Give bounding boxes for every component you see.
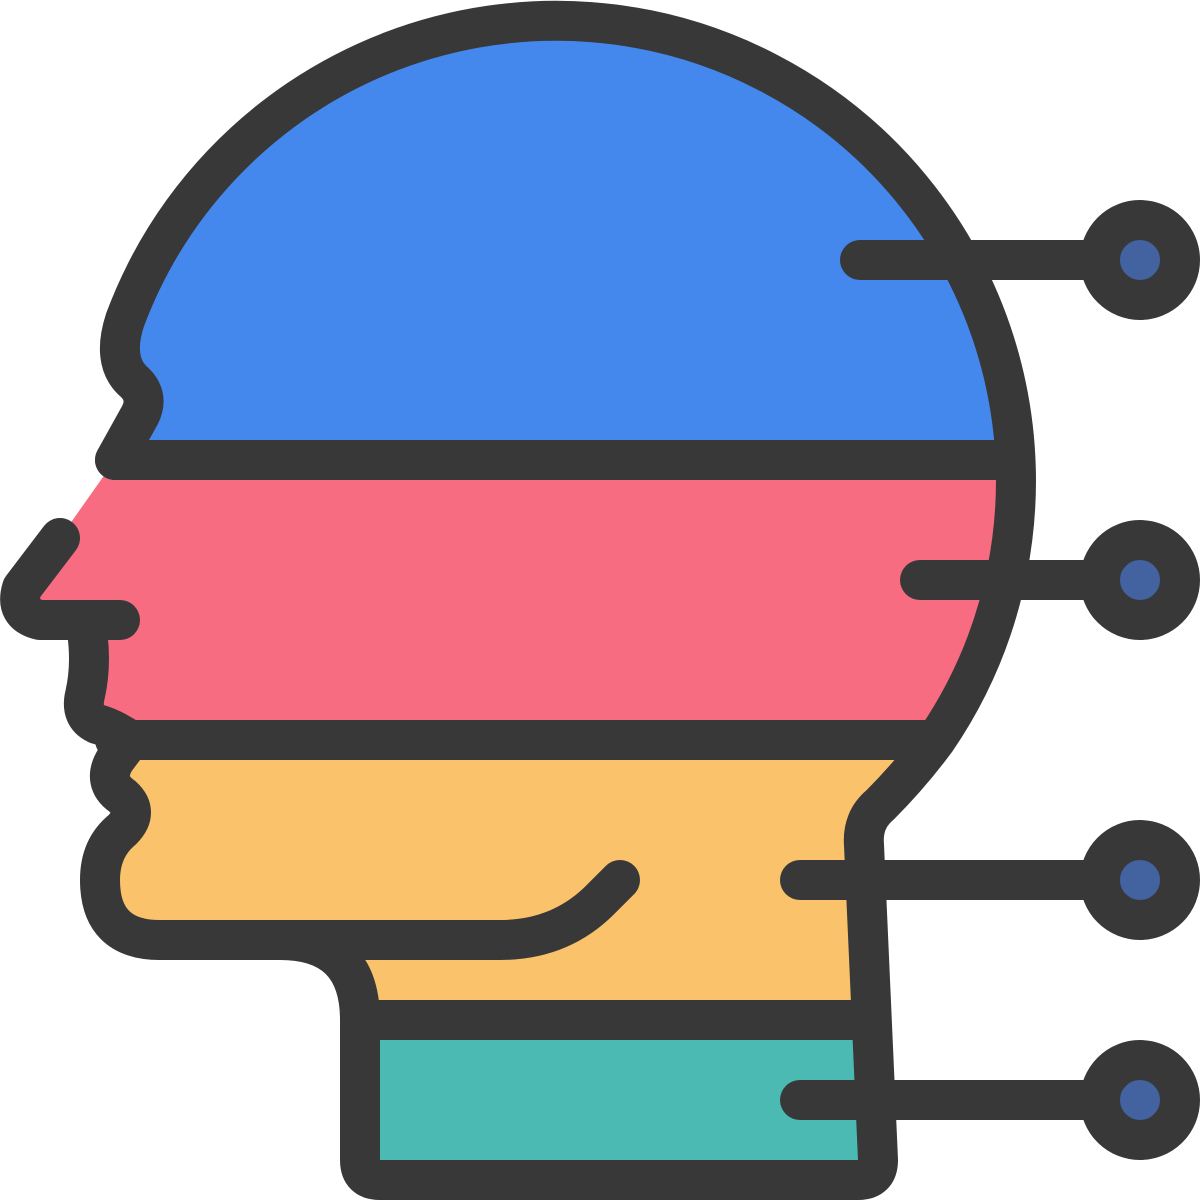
connector 4 [800,1060,1180,1140]
band: pink [40,476,996,720]
connector 2 [920,540,1180,620]
band: blue top [40,40,996,1160]
band: teal [380,1040,858,1160]
connector 3 [800,840,1180,920]
connector 1 [860,220,1180,300]
band: yellow [120,760,894,1000]
